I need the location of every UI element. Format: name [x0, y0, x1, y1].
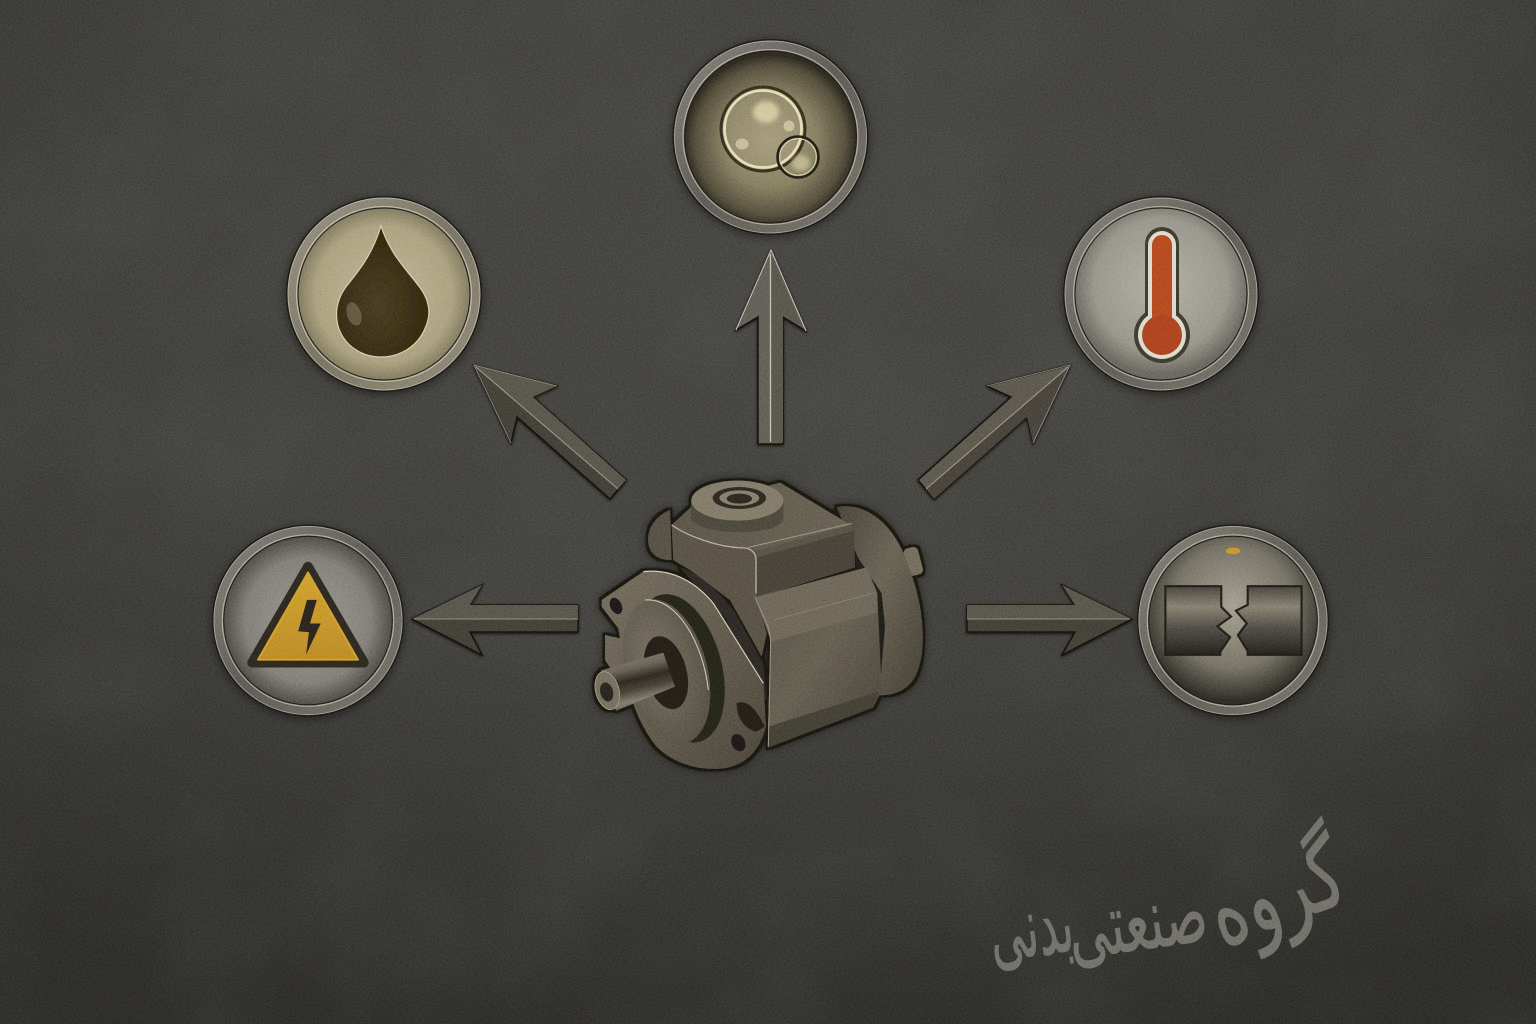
arrow: upper left to oil drop [474, 365, 626, 499]
front disc and collar [608, 584, 740, 754]
main body [755, 567, 882, 747]
watermark: Persian calligraphy: بدنی [982, 873, 1079, 982]
icon: bubbles [721, 87, 818, 178]
mounting flange [602, 567, 767, 769]
icon: warning triangle [252, 567, 364, 663]
arrow: left to electrical warning [412, 585, 578, 655]
arrow: upper right to thermometer [918, 365, 1070, 499]
medallion: dirty oil drop [286, 196, 482, 392]
hydraulic pump [591, 481, 924, 769]
icon: thermometer [1134, 227, 1190, 363]
top port boss [691, 481, 783, 532]
drive shaft [591, 653, 675, 712]
watermark: Persian calligraphy: صنعتی [1061, 864, 1213, 980]
watermark: Persian calligraphy [982, 814, 1361, 982]
medallion: overheating thermometer [1063, 196, 1259, 392]
upper block [672, 483, 855, 657]
arrow: right to broken shaft [967, 585, 1132, 655]
medallion: electrical warning [212, 524, 404, 717]
watermark: Persian calligraphy: گروه [1191, 814, 1361, 970]
rear housing [648, 506, 924, 695]
medallion: air bubbles [672, 39, 868, 235]
medallion: broken shaft [1137, 524, 1329, 717]
arrow: up to bubbles [736, 250, 806, 444]
icon: oil drop [336, 226, 429, 357]
icon: fractured shaft [1165, 548, 1302, 655]
